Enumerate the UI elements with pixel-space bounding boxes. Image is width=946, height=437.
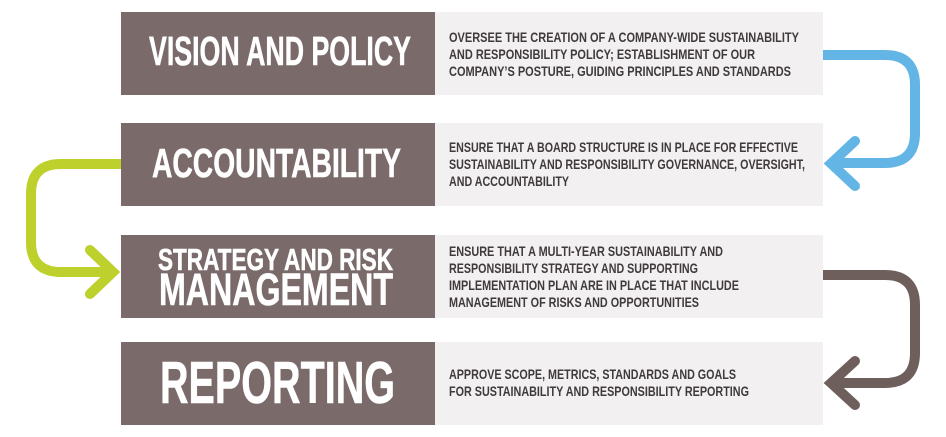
description panel: accountability: SUSTAINABILITY AND RESPONSIBILITY GOVERNANCE, OVERSIGHT,: [449, 156, 805, 172]
description panel: accountability: ENSURE THAT A BOARD STRUCTURE IS IN PLACE FOR EFFECTIVE: [449, 139, 798, 155]
row: accountability: [121, 123, 823, 206]
heading panel: vision and policy: [121, 12, 435, 95]
description panel: strategy and risk management: ENSURE THAT A MULTI-YEAR SUSTAINABILITY AND: [449, 243, 723, 259]
description panel: vision and policy: COMPANY’S POSTURE, GUIDING PRINCIPLES AND STANDARDS: [449, 63, 791, 79]
description panel: reporting: FOR SUSTAINABILITY AND RESPONSIBILITY REPORTING: [449, 383, 749, 399]
description panel: accountability: [435, 123, 823, 206]
description panel: vision and policy: AND RESPONSIBILITY POLICY; ESTABLISHMENT OF OUR: [449, 46, 755, 62]
arrow: green, accountability to strategy: [31, 164, 121, 294]
description panel: strategy and risk management: IMPLEMENTATION PLAN ARE IN PLACE THAT INCLUDE: [449, 277, 739, 293]
arrow: blue, vision to accountability: [823, 55, 915, 186]
heading panel: vision and policy: VISION AND POLICY: [149, 28, 411, 74]
description panel: vision and policy: OVERSEE THE CREATION OF A COMPANY-WIDE SUSTAINABILITY: [449, 29, 800, 45]
heading panel: accountability: [121, 123, 435, 206]
description panel: vision and policy: [435, 12, 823, 95]
arrow: brown, strategy to reporting: [823, 275, 915, 405]
heading panel: reporting: [121, 342, 435, 425]
description panel: reporting: APPROVE SCOPE, METRICS, STANDARDS AND GOALS: [449, 366, 736, 382]
description panel: strategy and risk management: RESPONSIBILITY STRATEGY AND SUPPORTING: [449, 260, 698, 276]
heading panel: accountability: ACCOUNTABILITY: [152, 140, 401, 186]
row: vision and policy: [121, 12, 823, 95]
heading panel: reporting: REPORTING: [160, 349, 395, 416]
row: reporting: [121, 342, 823, 425]
row: strategy and risk management: [121, 235, 823, 318]
heading panel: strategy and risk management: MANAGEMENT: [159, 264, 393, 315]
description panel: reporting: [435, 342, 823, 425]
description panel: strategy and risk management: [435, 235, 823, 318]
description panel: accountability: AND ACCOUNTABILITY: [449, 173, 569, 189]
heading panel: strategy and risk management: [121, 235, 435, 318]
description panel: strategy and risk management: MANAGEMENT OF RISKS AND OPPORTUNITIES: [449, 294, 699, 310]
heading panel: strategy and risk management: STRATEGY AND RISK: [158, 243, 393, 277]
